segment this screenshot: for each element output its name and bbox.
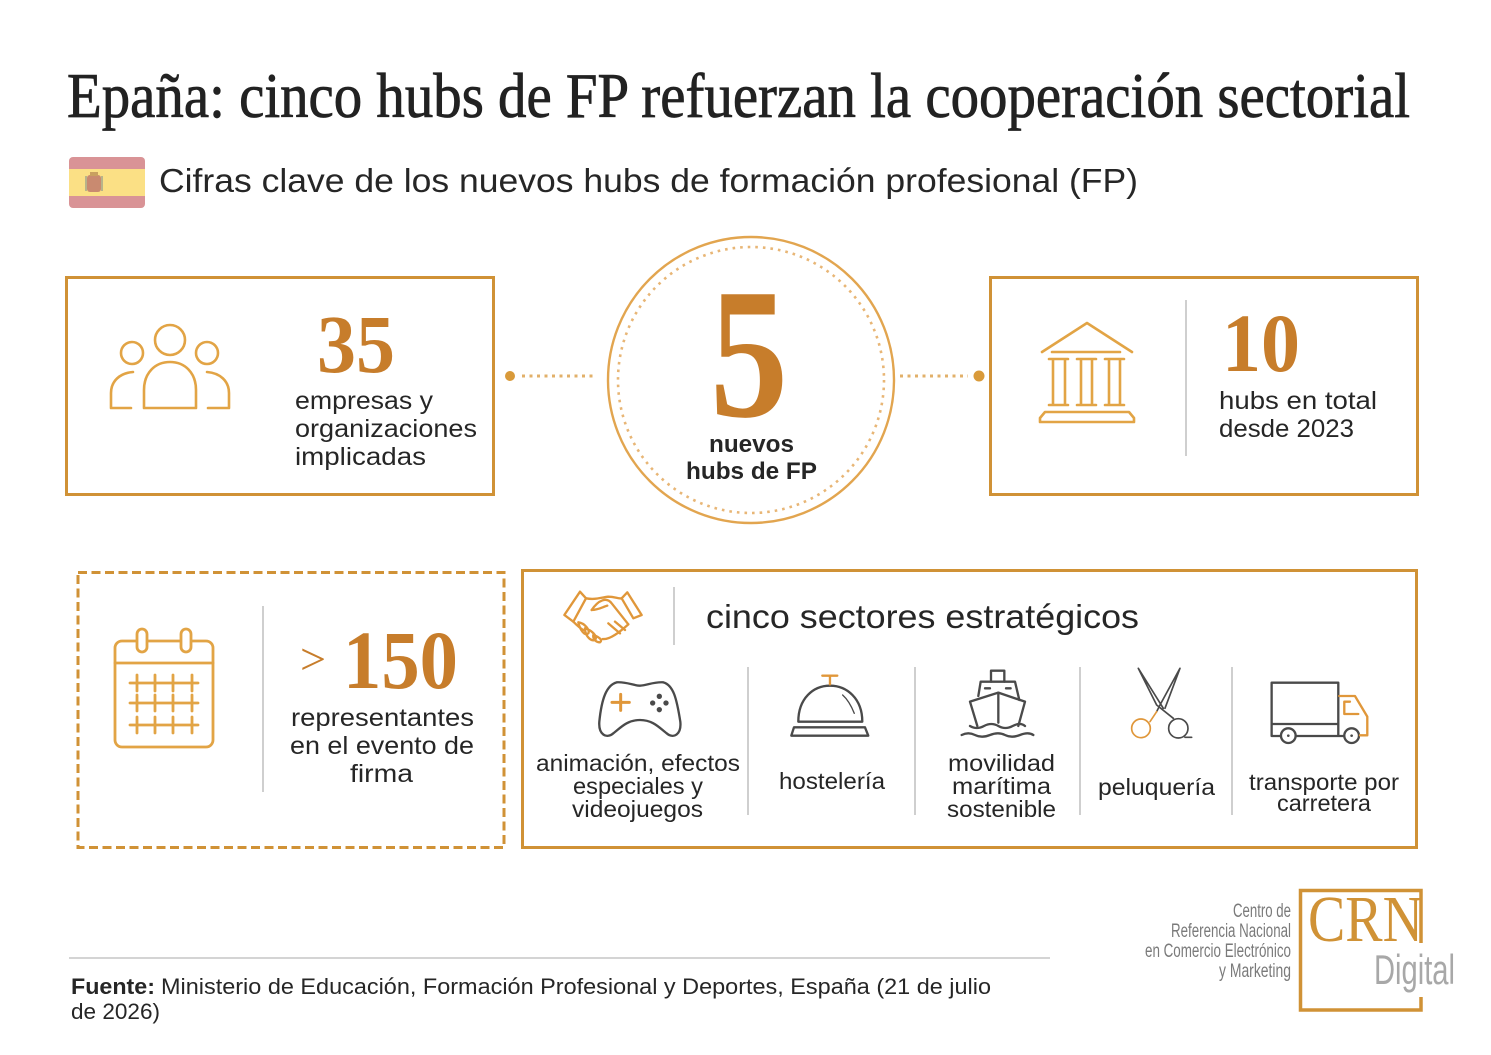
number: 5: 5	[710, 251, 788, 457]
panel: central circle	[608, 237, 894, 523]
text: 10 label	[1219, 387, 1377, 443]
text: 35 label: organizaciones	[295, 415, 477, 443]
icon: scissors	[1132, 668, 1192, 738]
text: maritime: movilidad	[948, 750, 1055, 776]
text: 150 label: en el evento de	[290, 732, 474, 760]
text: animation: animación, efectos	[536, 750, 740, 776]
icon: game controller	[599, 682, 680, 736]
text: 10 label: hubs en total	[1219, 387, 1377, 415]
panel: 150 representatives	[78, 572, 504, 848]
connector: right	[900, 370, 984, 382]
icon: truck	[1272, 683, 1367, 743]
number: > 150	[300, 614, 458, 706]
text: maritime: marítima	[952, 773, 1051, 799]
text: logo description: Referencia Nacional	[1171, 921, 1291, 942]
text: logo description: Centro de	[1233, 901, 1291, 922]
text: logo description	[1145, 901, 1291, 982]
icon: handshake	[564, 592, 642, 642]
number: 10: 10	[1222, 297, 1300, 389]
icon: service bell	[791, 676, 868, 736]
number: 35: 35	[317, 298, 395, 390]
source note	[71, 974, 991, 1024]
text: animation: videojuegos	[572, 796, 703, 822]
text: peluquería: peluquería	[1098, 774, 1215, 800]
icon: Spanish flag	[69, 157, 145, 208]
source note: de 2026)	[71, 999, 160, 1024]
text: 150 label: representantes	[291, 704, 474, 732]
panel: five strategic sectors	[522, 570, 1416, 848]
text: logo description: en Comercio Electrónico	[1145, 941, 1291, 962]
text: animation	[536, 750, 740, 822]
text: transport: carretera	[1277, 790, 1371, 816]
icon: ship	[962, 671, 1033, 737]
text: 150 label: firma	[350, 760, 413, 788]
text: 35 label: implicadas	[295, 443, 426, 471]
text: 35 label	[295, 387, 477, 471]
source note: Ministerio de Educación, Formación Profesional y Deportes, España (21 de julio	[161, 974, 991, 999]
text: nuevos hubs de FP	[686, 431, 817, 485]
text: maritime	[947, 750, 1056, 822]
icon: classical building	[1040, 323, 1134, 422]
text: 35 label: empresas y	[295, 387, 434, 415]
logo: CRN Digital: CRN	[1308, 883, 1423, 956]
text: nuevos hubs de FP: nuevos	[709, 431, 794, 458]
heading: sectors: cinco sectores estratégicos	[706, 598, 1139, 635]
text: logo description: y Marketing	[1219, 961, 1291, 982]
logo: CRN Digital: Digital	[1374, 946, 1455, 993]
text: transport	[1249, 769, 1399, 816]
text: transport: transporte por	[1249, 769, 1399, 795]
icon: people	[111, 325, 229, 408]
text: hostelería: hostelería	[779, 768, 885, 794]
text: nuevos hubs de FP: hubs de FP	[686, 458, 817, 485]
logo: CRN Digital	[1145, 883, 1455, 1010]
text: 10 label: desde 2023	[1219, 415, 1354, 443]
text: animation: especiales y	[573, 773, 704, 799]
icon: calendar	[115, 629, 213, 747]
subtitle: Cifras clave de los nuevos hubs de formación profesional (FP)	[159, 162, 1138, 199]
text: 150 label	[290, 704, 474, 788]
connector: left	[505, 371, 597, 381]
source note: Fuente:	[71, 974, 155, 999]
panel: 35 companies	[66, 278, 494, 494]
panel: 10 hubs	[990, 278, 1418, 494]
number: > 150: >	[300, 635, 326, 684]
number: > 150: 150	[343, 614, 458, 706]
text: maritime: sostenible	[947, 796, 1056, 822]
